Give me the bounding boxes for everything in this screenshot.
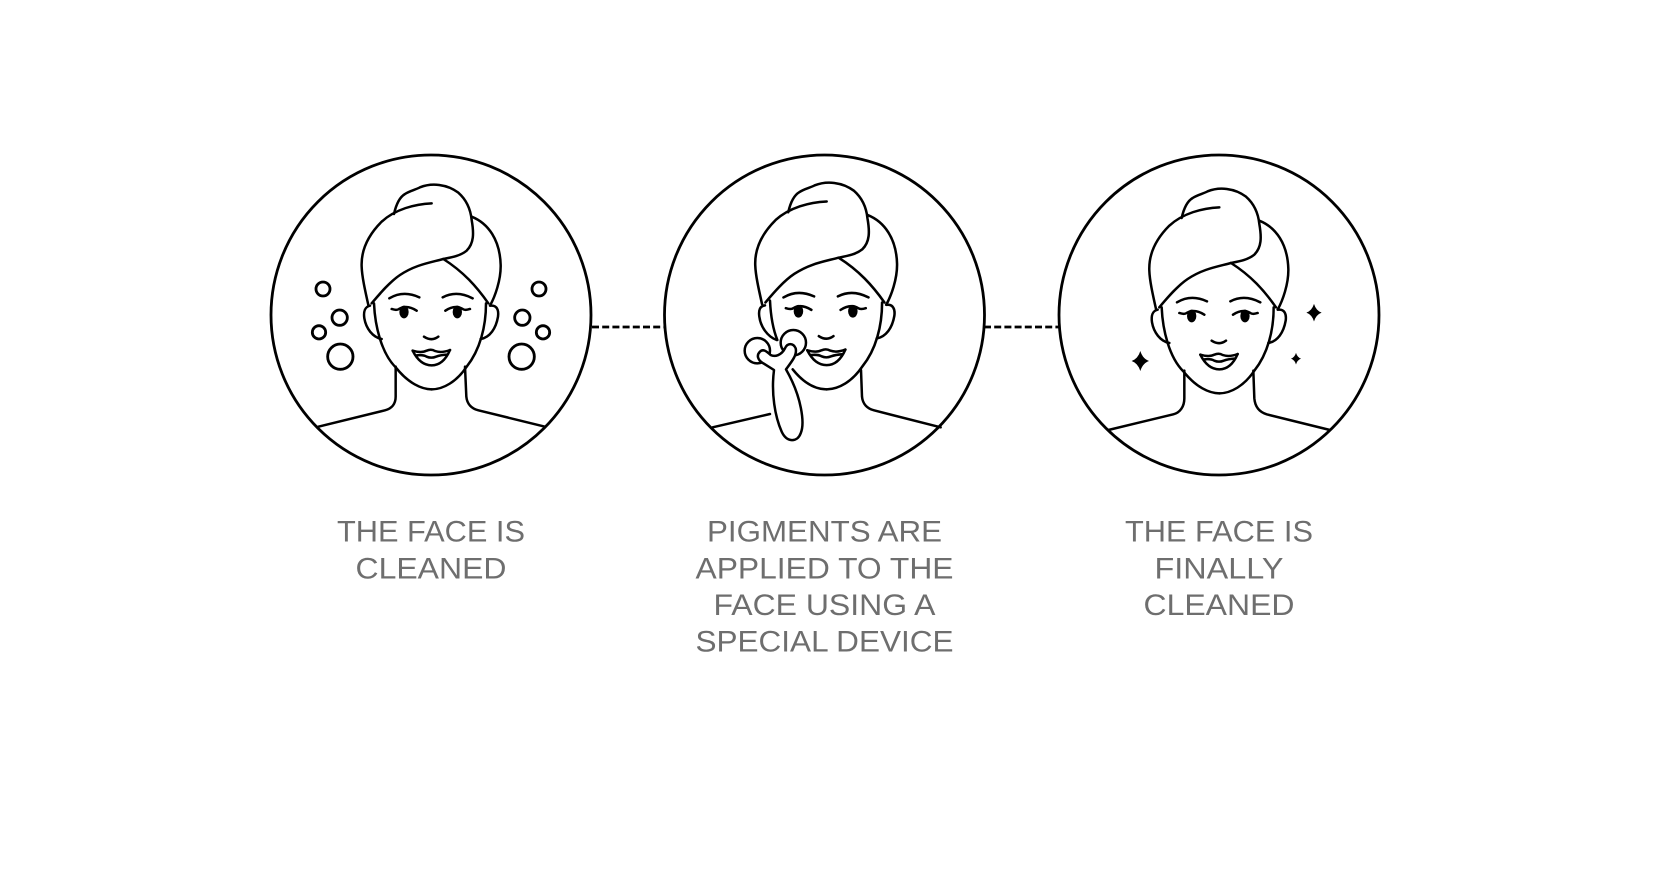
caption: step 2: FACE USING A: [714, 589, 936, 622]
caption: step 1: CLEANED: [356, 552, 506, 585]
caption: step 2: PIGMENTS ARE: [707, 516, 942, 549]
caption: step 1: THE FACE IS: [337, 516, 525, 549]
caption: step 3: THE FACE IS: [1125, 516, 1313, 549]
circle frame: [1059, 155, 1379, 475]
circle frame: [664, 155, 984, 475]
panel: step 2 face with roller device: [664, 155, 984, 475]
woman portrait with towel: [1108, 189, 1330, 430]
caption: step 2: APPLIED TO THE: [696, 552, 954, 585]
dashed connector: step 2 to step 3: [984, 326, 1059, 328]
portrait left side and neck, partly hidden by roller: [713, 301, 941, 427]
panel: step 3 face with sparkles: [1059, 155, 1379, 475]
dashed connector: step 1 to step 2: [592, 326, 665, 328]
icon: facial roller: [745, 330, 806, 440]
caption: step 2: SPECIAL DEVICE: [696, 626, 954, 659]
circle frame: [271, 155, 591, 475]
caption: step 3: FINALLY: [1154, 552, 1284, 585]
woman portrait with towel: [318, 185, 545, 427]
panel: step 1 face with bubbles: [271, 155, 591, 475]
icon: sparkles: [1132, 304, 1322, 371]
caption: step 3: CLEANED: [1144, 589, 1294, 622]
icon: bubbles: [312, 282, 550, 369]
woman portrait with towel: [755, 183, 897, 389]
